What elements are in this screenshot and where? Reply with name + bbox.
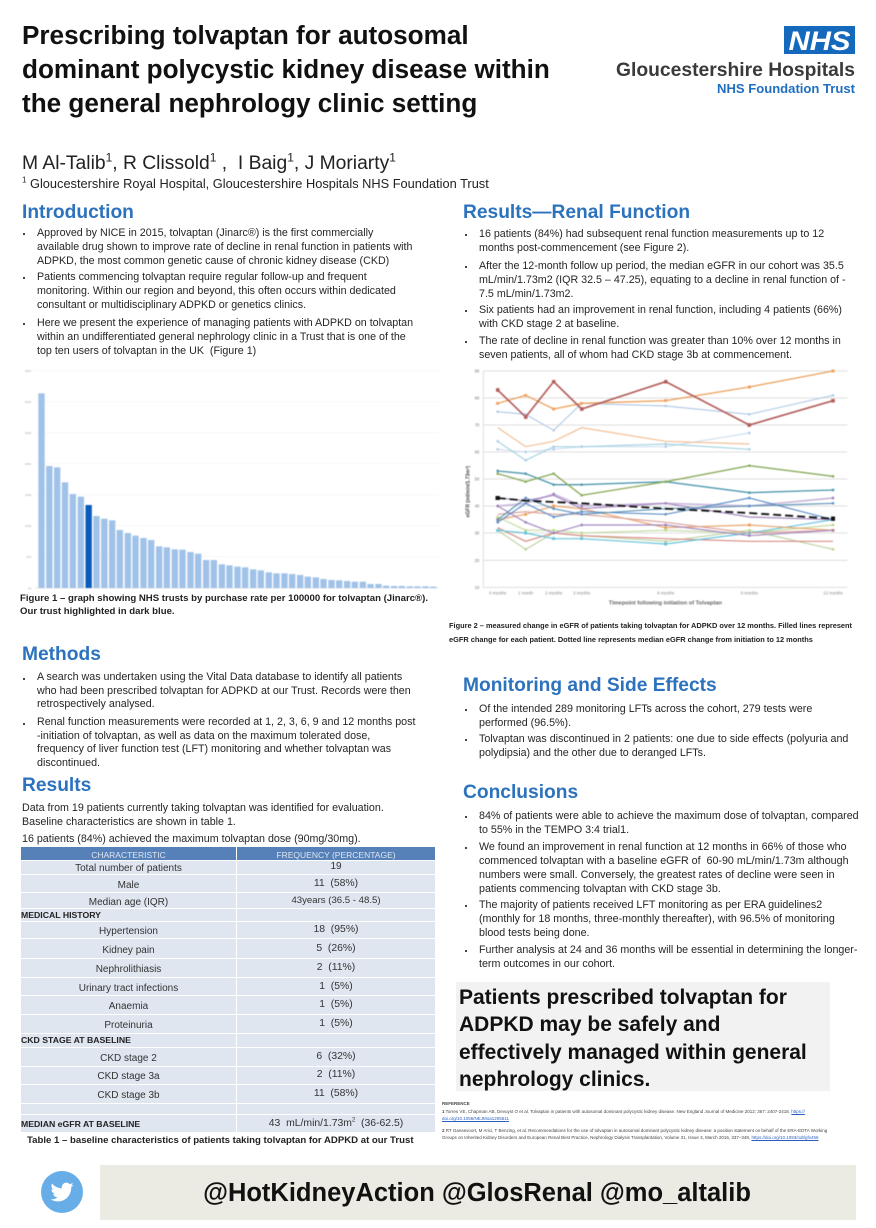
table 1: baseline characteristics: Median age (IQR): [89, 897, 168, 908]
intro bullet 2: Patients commencing tolvaptan require regular follow-up and frequent: [37, 271, 367, 283]
methods bullet 1: who had been prescribed tolvaptan for ADPKD at our Trust. Records were then: [37, 684, 411, 696]
table 1: baseline characteristics: Nephrolithiasis: [96, 964, 161, 975]
line chart: eGFR over 12 months: 0 months: [489, 591, 506, 596]
intro bullet 1: Approved by NICE in 2015, tolvaptan (Jinarc®) is the first commercially: [37, 227, 373, 239]
line chart: eGFR over 12 months: 1 month: [518, 591, 534, 596]
table 1: baseline characteristics: 19: [330, 861, 342, 872]
line chart: eGFR over 12 months: 12 months: [823, 591, 843, 596]
table 1: baseline characteristics: 18 (95%): [313, 924, 359, 935]
heading: conclusions: Conclusions: [463, 782, 578, 802]
conclusions bullet 3: The majority of patients received LFT monitoring as per ERA guidelines2: [479, 899, 822, 911]
logo: foundation trust: NHS Foundation Trust: [717, 82, 856, 96]
references: Groups on Inherited Kidney Disorders and European Renal Best Practice, Nephrology Dialysis Transplantation, Volume 31, Issue 3, March 2016, 337–348, https://doi.org/10.1093/ndt/gfv456: [442, 1135, 818, 1140]
logo: NHS Gloucestershire Hospitals: [616, 26, 856, 96]
results intro text: [22, 802, 384, 828]
caption: figure 1: Our trust highlighted in dark blue.: [20, 606, 175, 617]
line chart: eGFR over 12 months: eGFR (ml/min/1.73m²): [466, 466, 472, 517]
renal bullet 1: 16 patients (84%) had subsequent renal function measurements up to 12: [479, 228, 824, 240]
panel: monitoring and side effects: [463, 674, 848, 759]
line chart: eGFR over 12 months: 2 months: [545, 591, 562, 596]
panel: figure 1: [20, 369, 438, 617]
renal bullet 4: The rate of decline in renal function was greater than 10% over 12 months in: [479, 335, 841, 347]
logo: trust name: Gloucestershire Hospitals: [616, 59, 855, 81]
callout: key message: nephrology clinics.: [459, 1068, 650, 1091]
icon: twitter: [41, 1171, 83, 1213]
caption: figure 1: Figure 1 – graph showing NHS trusts by purchase rate per 100000 for tolvaptan (Jinarc®).: [20, 593, 428, 604]
caption: figure 2: eGFR change for each patient. Dotted line represents median eGFR change from initiation to 12 months: [449, 635, 813, 644]
monitoring bullet 1: [479, 702, 812, 730]
monitoring bullet 2: Tolvaptan was discontinued in 2 patients: one due to side effects (polyuria and: [479, 733, 848, 745]
table 1: baseline characteristics: 2 (11%): [317, 962, 355, 973]
logo: NHS lozenge: NHS: [788, 26, 850, 56]
table 1: baseline characteristics: CKD stage 2: [100, 1053, 157, 1064]
renal bullet 1: [479, 227, 824, 255]
title: dominant polycystic kidney disease within: [22, 54, 550, 84]
renal bullet 4: seven patients, all of whom had CKD stage 3b at commencement.: [479, 349, 792, 361]
references: [442, 1101, 827, 1141]
line chart: eGFR over 12 months: 60: [475, 450, 480, 455]
table 1: baseline characteristics: 43 mL/min/1.73m2 (36-62.5): [269, 1117, 403, 1129]
monitoring bullet 1: Of the intended 289 monitoring LFTs across the cohort, 279 tests were: [479, 703, 812, 715]
renal bullet 4: [479, 334, 841, 362]
caption: figure 2: [449, 621, 852, 644]
bar chart: purchase rate by NHS trust: 250k: [25, 431, 32, 435]
line chart: eGFR over 12 months: 3 months: [573, 591, 590, 596]
callout: key message: [456, 982, 830, 1091]
table 1: baseline characteristics: Kidney pain: [102, 945, 155, 956]
panel: introduction: [22, 202, 413, 357]
renal bullet 3: [479, 303, 842, 331]
conclusions bullet 2: numbers were small. Conversely, the greatest rates of decline were seen in: [479, 869, 835, 881]
bar chart: purchase rate by NHS trust: 100k: [25, 524, 32, 528]
table 1: baseline characteristics: 1 (5%): [319, 1018, 353, 1029]
renal bullet 2: [479, 259, 846, 301]
panel: methods: [22, 644, 416, 768]
line chart: eGFR over 12 months: 20: [475, 558, 480, 563]
bar chart: purchase rate by NHS trust: 0k: [28, 586, 32, 590]
table 1: baseline characteristics: CHARACTERISTIC: [91, 850, 166, 860]
author names: M Al-Talib1, R Clissold1 , I Baig1, J Moriarty1: [22, 151, 396, 174]
intro bullet 3: Here we present the experience of managing patients with ADPKD on tolvaptan: [37, 317, 413, 329]
table 1: baseline characteristics: 43years (36.5 - 48.5): [291, 895, 381, 906]
table 1: baseline characteristics: Hypertension: [99, 926, 158, 937]
conclusions bullet 3: [479, 898, 835, 940]
bar chart: purchase rate by NHS trust: 200k: [25, 462, 32, 466]
line chart: eGFR over 12 months: 90: [475, 369, 480, 374]
callout: key message: ADPKD may be safely and: [459, 1013, 720, 1036]
table 1: baseline characteristics: Anaemia: [109, 1001, 148, 1012]
table 1: baseline characteristics: 2 (11%): [317, 1069, 355, 1080]
intro bullet 2: monitoring. Within our region and beyond, this often occurs within dedicated: [37, 285, 396, 297]
caption: table 1: Table 1 – baseline characteristics of patients taking tolvaptan for ADPKD at our Trust: [27, 1135, 414, 1146]
line chart: eGFR over 12 months: 30: [475, 531, 480, 536]
line chart: eGFR over 12 months: Timepoint following initiation of Tolvaptan: [609, 600, 722, 606]
authors: [22, 151, 489, 190]
conclusions bullet 1: [479, 809, 859, 837]
renal bullet 3: with CKD stage 2 at baseline.: [479, 318, 619, 330]
heading: methods: Methods: [22, 644, 101, 664]
monitoring bullet 2: [479, 732, 848, 760]
title: Prescribing tolvaptan for autosomal: [22, 20, 469, 50]
table 1: baseline characteristics: CKD STAGE AT BASELINE: [21, 1035, 131, 1045]
callout: key message: Patients prescribed tolvaptan for: [459, 986, 787, 1008]
conclusions bullet 3: (monthly for 18 months, three-monthly thereafter), with 96.5% of monitoring: [479, 913, 835, 925]
table 1: baseline characteristics: Male: [118, 880, 139, 891]
results intro text: Baseline characteristics are shown in table 1.: [22, 816, 236, 828]
intro bullet 3: top ten users of tolvaptan in the UK (Figure 1): [37, 345, 256, 357]
intro bullet 2: [37, 270, 396, 312]
panel: conclusions: [463, 782, 859, 970]
line chart: eGFR over 12 months: 70: [475, 423, 480, 428]
intro bullet 1: available drug shown to improve rate of decline in renal function in patients with: [37, 241, 412, 253]
renal bullet 2: After the 12-month follow up period, the median eGFR in our cohort was 35.5: [479, 260, 844, 272]
bar chart: purchase rate by NHS trust: 50k: [26, 555, 32, 559]
monitoring bullet 1: performed (96.5%).: [479, 717, 571, 729]
monitoring bullet 2: polydipsia) and the other due to deranged LFTs.: [479, 747, 706, 759]
table 1: baseline characteristics: MEDICAL HISTORY: [21, 910, 101, 920]
table 1: baseline characteristics: CKD stage 3a: [97, 1071, 160, 1082]
table 1: baseline characteristics: 1 (5%): [319, 981, 353, 992]
conclusions bullet 2: patients commencing tolvaptan with CKD stage 3b.: [479, 883, 721, 895]
renal bullet 3: Six patients had an improvement in renal function, including 4 patients (66%): [479, 304, 842, 316]
table 1: baseline characteristics: 11 (58%): [314, 1088, 358, 1099]
bar chart: purchase rate by NHS trust: [24, 369, 438, 590]
table 1: baseline characteristics: 6 (32%): [316, 1051, 356, 1062]
line chart: eGFR over 12 months: [464, 368, 848, 606]
intro bullet 2: consultant or multidisciplinary ADPKD or genetics clinics.: [37, 299, 306, 311]
intro bullet 3: within an undifferentiated general nephrology clinic in a Trust that is one of the: [37, 331, 406, 343]
panel: results: [21, 774, 435, 1146]
intro bullet 1: ADPKD, the most common genetic cause of chronic kidney disease (CKD): [37, 255, 389, 267]
references: 1 Torres VE, Chapman AB, Devuyst O et al. Tolvaptan in patients with autosomal dominant polycystic kidney disease. New England Journal of Medicine 2012; 367: 2407-2418. https://: [442, 1108, 805, 1114]
conclusions bullet 3: blood tests being done.: [479, 927, 590, 939]
caption: figure 1: [20, 593, 428, 617]
affiliation: 1 Gloucestershire Royal Hospital, Gloucestershire Hospitals NHS Foundation Trust: [22, 175, 489, 190]
methods bullet 2: frequency of liver function test (LFT) monitoring and whether tolvaptan was: [37, 743, 391, 755]
caption: figure 2: Figure 2 – measured change in eGFR of patients taking tolvaptan for ADPKD over 12 months. Filled lines represent: [449, 621, 852, 630]
conclusions bullet 2: commenced tolvaptan with a baseline eGFR of 60-90 mL/min/1.73m although: [479, 855, 849, 867]
references: 2 RT Gansevoort, M Arici, T Benzing, et al. Recommendations for the use of tolvaptan in autosomal dominant polycystic kidney disease: a position statement on behalf of the ERA-EDTA Working: [442, 1128, 827, 1132]
table 1: baseline characteristics: [21, 847, 435, 1132]
conclusions bullet 4: term outcomes in our cohort.: [479, 958, 615, 970]
results maximum dose text: 16 patients (84%) achieved the maximum tolvaptan dose (90mg/30mg).: [22, 833, 361, 845]
methods bullet 1: A search was undertaken using the Vital Data database to identify all patients: [37, 671, 402, 683]
heading: results: Results: [22, 774, 91, 796]
title: [22, 20, 550, 118]
line chart: eGFR over 12 months: 40: [475, 504, 480, 509]
line chart: eGFR over 12 months: 9 months: [741, 591, 758, 596]
heading: monitoring and side effects: Monitoring and Side Effects: [463, 674, 717, 696]
title: the general nephrology clinic setting: [22, 88, 477, 118]
conclusions bullet 4: [479, 943, 857, 971]
intro bullet 1: [37, 226, 412, 268]
table 1: baseline characteristics: CKD stage 3b: [97, 1090, 160, 1101]
conclusions bullet 1: to 55% in the TEMPO 3:4 trial1.: [479, 824, 629, 836]
results intro text: Data from 19 patients currently taking tolvaptan was identified for evaluation.: [22, 802, 384, 814]
line chart: eGFR over 12 months: 6 months: [657, 591, 674, 596]
conclusions bullet 1: 84% of patients were able to achieve the maximum dose of tolvaptan, compared: [479, 810, 859, 822]
intro bullet 3: [37, 316, 413, 358]
methods bullet 2: Renal function measurements were recorded at 1, 2, 3, 6, 9 and 12 months post: [37, 716, 415, 728]
methods bullet 2: [37, 716, 415, 770]
table 1: baseline characteristics: 11 (58%): [314, 878, 358, 889]
table 1: baseline characteristics: Proteinuria: [104, 1020, 153, 1031]
line chart: eGFR over 12 months: 80: [475, 396, 480, 401]
bar chart: purchase rate by NHS trust: 150k: [25, 493, 32, 497]
heading: introduction: Introduction: [22, 202, 134, 222]
table 1: baseline characteristics: MEDIAN eGFR AT BASELINE: [21, 1119, 140, 1129]
references: REFERENCE: [442, 1101, 470, 1106]
line chart: eGFR over 12 months: 10: [475, 585, 480, 590]
renal bullet 2: 7.5 mL/min/1.73m2.: [479, 288, 573, 300]
methods bullet 1: [37, 671, 411, 712]
methods bullet 1: retrospectively analysed.: [37, 698, 155, 710]
table 1: baseline characteristics: FREQUENCY (PERCENTAGE): [276, 850, 396, 860]
footer: twitter handles: [100, 1165, 856, 1220]
references: doi.org/10.1056/NEJMoa1205511: [442, 1116, 509, 1121]
callout: key message: effectively managed within general: [459, 1040, 807, 1064]
conclusions bullet 2: [479, 840, 849, 896]
table 1: baseline characteristics: Urinary tract infections: [79, 983, 178, 994]
panel: figure 2: [449, 368, 852, 644]
table 1: baseline characteristics: 1 (5%): [319, 999, 353, 1010]
line chart: eGFR over 12 months: 50: [475, 477, 480, 482]
renal bullet 2: mL/min/1.73m2 (IQR 32.5 – 47.25), equating to a decline in renal function of -: [479, 274, 846, 286]
renal bullet 1: months post-commencement (see Figure 2).: [479, 242, 689, 254]
bar chart: purchase rate by NHS trust: 350k: [25, 369, 32, 373]
footer: twitter handles: @HotKidneyAction @GlosRenal @mo_altalib: [203, 1179, 751, 1207]
bar chart: purchase rate by NHS trust: 300k: [25, 400, 32, 404]
conclusions bullet 4: Further analysis at 24 and 36 months will be essential in determining the longer-: [479, 944, 857, 956]
table 1: baseline characteristics: Total number of patients: [75, 863, 182, 874]
methods bullet 2: discontinued.: [37, 756, 100, 768]
methods bullet 2: -initiation of tolvaptan, as well as data on the maximum tolerated dose,: [37, 730, 370, 742]
panel: results renal function: [463, 202, 846, 361]
heading: results renal function: Results—Renal Function: [463, 202, 690, 222]
conclusions bullet 2: We found an improvement in renal function at 12 months in 66% of those who: [479, 841, 847, 853]
table 1: baseline characteristics: 5 (26%): [316, 943, 356, 954]
